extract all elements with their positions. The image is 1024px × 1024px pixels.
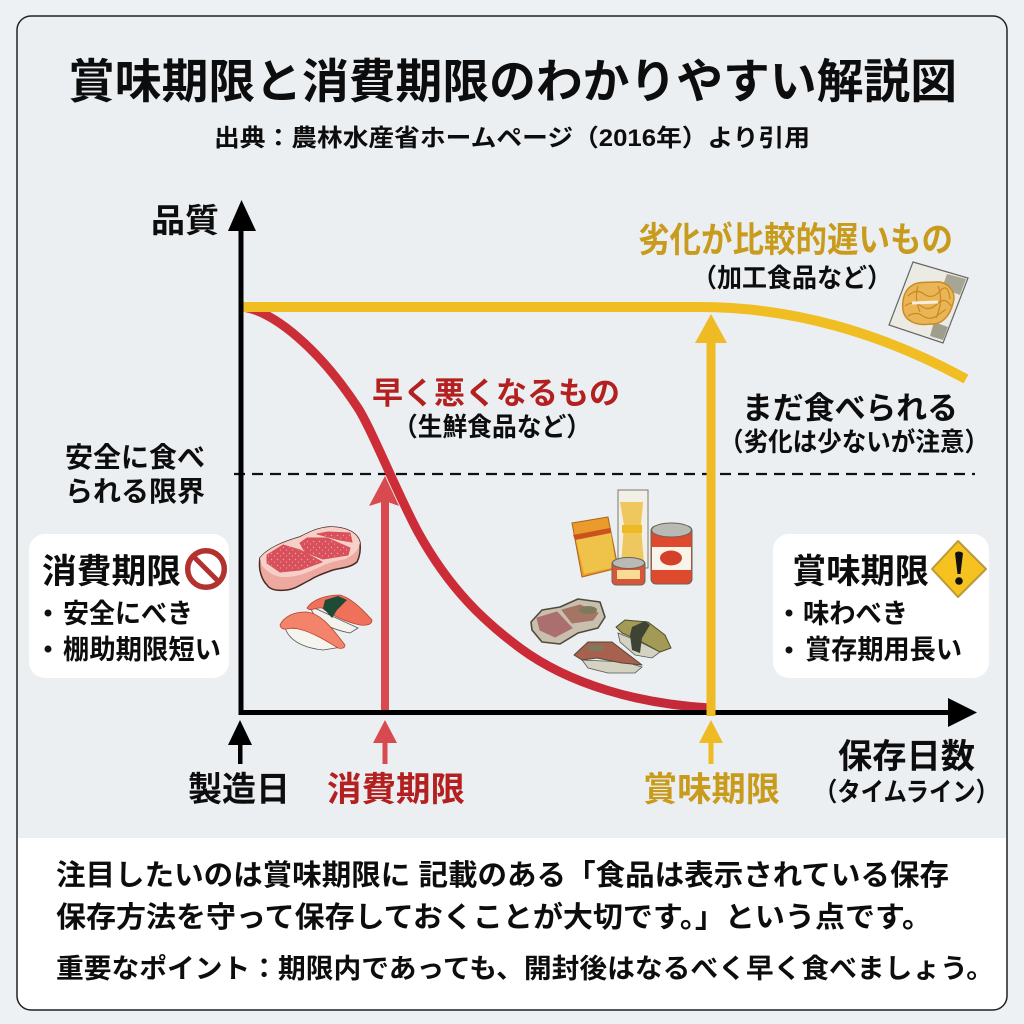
icon: prohibited <box>188 551 224 587</box>
icon: preserved foods group <box>572 490 692 585</box>
heading: fast degradation: 早く悪くなるもの <box>372 376 620 411</box>
card bullets <box>44 599 221 665</box>
card heading: 賞味期限 <box>792 553 929 591</box>
card bullets <box>786 599 962 665</box>
orange snack bag <box>572 517 618 577</box>
safe limit label <box>65 442 205 507</box>
tomato can <box>651 523 692 584</box>
yellow best-before arrow <box>695 314 727 716</box>
label: best-before date: 賞味期限 <box>643 771 780 809</box>
sub-label: fresh foods: （生鮮食品など） <box>393 412 591 442</box>
panel: best-before card <box>773 534 989 678</box>
x axis sub-label: （タイムライン） <box>814 777 999 807</box>
card bullets: 賞存期用長い <box>805 635 962 665</box>
icon: spoiled sushi <box>574 620 671 673</box>
panel: bottom note <box>18 838 1006 1009</box>
subtitle: source: 出典：農林水産省ホームページ（2016年）より引用 <box>214 125 810 152</box>
red fast-degradation curve <box>243 307 710 708</box>
label: manufacture date: 製造日 <box>188 771 290 809</box>
card bullets: 味わべき <box>803 599 908 629</box>
x axis <box>238 698 977 727</box>
dashed limit line <box>234 473 975 475</box>
icon: fresh sushi <box>280 595 372 650</box>
sub-label: processed foods: （加工食品など） <box>692 263 892 293</box>
card bullets: 棚助期限短い <box>63 635 221 665</box>
safe limit label: 安全に食べ <box>65 442 205 473</box>
small can <box>612 558 645 585</box>
pasta package <box>618 490 648 568</box>
best-before arrow <box>699 720 723 764</box>
note: less degradation but caution: （劣化は少ないが注意） <box>719 427 989 457</box>
yellow slow-degradation curve <box>243 307 966 379</box>
red expiry arrow <box>369 476 399 715</box>
icon: spoiled meat <box>531 599 605 644</box>
note: still edible: まだ食べられる <box>742 391 958 426</box>
card heading: 消費期限 <box>42 553 181 591</box>
panel: use-by card <box>29 534 229 678</box>
y axis <box>228 200 256 715</box>
icon: warning <box>932 541 986 597</box>
icon: fresh meat <box>259 527 360 590</box>
use-by arrow <box>373 720 397 764</box>
note line 1: 注目したいのは賞味期限に 記載のある「食品は表示されている保存 <box>56 859 949 892</box>
icon: noodle bag <box>889 262 968 343</box>
card bullets: 安全にべき <box>63 599 193 629</box>
label: use-by date: 消費期限 <box>327 771 465 809</box>
important point: 重要なポイント：期限内であっても、開封後はなるべく早く食べましょう。 <box>56 954 994 984</box>
x axis label: 保存日数 <box>838 738 975 776</box>
safe limit label: られる限界 <box>65 476 205 507</box>
title: 賞味期限と消費期限のわかりやすい解説図 <box>68 55 957 108</box>
label: manufacture date arrow <box>228 720 252 764</box>
y axis label: 品質 <box>151 202 219 239</box>
note line 2: 保存方法を守って保存しておくことが大切です。」という点です。 <box>56 900 932 934</box>
heading: slow degradation: 劣化が比較的遅いもの <box>638 221 953 260</box>
